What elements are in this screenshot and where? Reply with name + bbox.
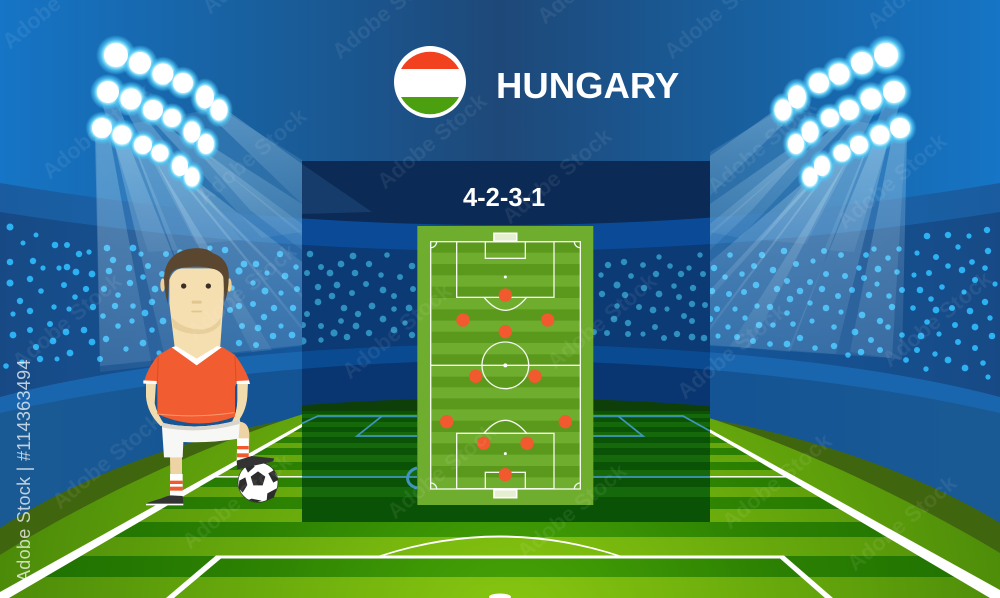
jersey (144, 347, 249, 424)
pitch spots (503, 275, 507, 455)
grass verge (0, 412, 1000, 598)
watermarks: Adobe Stock (47, 408, 167, 514)
right lamp glow (769, 35, 916, 193)
left floodlight beams (95, 100, 302, 372)
sock stripes (170, 446, 249, 491)
vertical stock credit: Adobe Stock | #114363494 (14, 359, 34, 582)
overlay top (302, 161, 710, 225)
crowd dots (3, 224, 998, 380)
lamp bulbs (92, 43, 228, 186)
overlay lower wall (302, 362, 710, 406)
right floodlight light wash (710, 108, 906, 358)
raised leg (233, 421, 249, 460)
left shoe (146, 495, 183, 504)
watermarks: Adobe Stock (717, 428, 837, 534)
watermarks: Adobe Stock (512, 458, 632, 564)
formation player markers (440, 288, 572, 481)
pitch stripes (432, 242, 580, 477)
standing leg (170, 456, 182, 497)
watermarks: Adobe Stock (7, 268, 127, 374)
grass embankment (0, 400, 1000, 598)
formation pitch card (417, 226, 593, 505)
overlay field stripes (302, 411, 710, 522)
faint beam through overlay (302, 164, 372, 214)
watermarks: Adobe Stock (177, 448, 297, 554)
collar (172, 346, 222, 365)
overlay stands (302, 244, 710, 352)
overlay lower band (302, 346, 710, 370)
overlay field (302, 414, 710, 497)
formation label: 4-2-3-1 (463, 184, 545, 212)
overlay stand band (302, 218, 710, 250)
watermarks: Adobe Stock (382, 418, 502, 524)
lamp glow (86, 35, 233, 193)
sleeve seams (157, 355, 236, 383)
jaw shadow (172, 317, 221, 334)
right floodlight lamps (769, 35, 916, 193)
lower stand wall (0, 360, 1000, 598)
right shoe (237, 456, 274, 469)
watermarks: Adobe Stock (832, 128, 952, 234)
watermarks: Adobe Stock (702, 93, 822, 199)
player illustration (143, 248, 278, 505)
arms (146, 383, 248, 426)
jersey hem (158, 413, 234, 416)
eyes (181, 283, 211, 289)
watermarks: Adobe Stock (877, 266, 997, 372)
field white lines (0, 416, 1000, 598)
title: HUNGARY (496, 65, 679, 106)
stand seating area (0, 212, 1000, 420)
watermarks: Adobe Stock (37, 78, 157, 184)
lower stand band (0, 344, 1000, 598)
ears (160, 278, 232, 292)
watermarks: Adobe Stock (497, 123, 617, 229)
neck and face (169, 268, 224, 363)
cuffs (143, 380, 250, 384)
watermarks: Adobe Stock (372, 88, 492, 194)
nose and mouth (191, 301, 202, 312)
central dark overlay panel (302, 161, 710, 522)
upper stand band (0, 183, 1000, 420)
card background (417, 226, 593, 505)
left floodlight lamps (86, 35, 233, 193)
hair (164, 248, 229, 304)
overlay crowd dots (299, 251, 708, 345)
shorts (162, 419, 240, 457)
overlay grass (302, 399, 710, 411)
socks (170, 438, 249, 497)
watermarks: Adobe Stock (192, 103, 312, 209)
flag: Hungary (394, 46, 466, 118)
watermarks: Adobe Stock (182, 238, 302, 344)
left shoe sole (146, 504, 183, 505)
pitch markings through overlay (302, 416, 710, 488)
right lamp bulbs (774, 43, 910, 186)
watermarks: Adobe Stock (542, 268, 662, 374)
field stripes (45, 427, 954, 577)
left floodlight light wash (96, 108, 302, 366)
soccer ball (238, 462, 278, 502)
watermarks: Adobe Stock (842, 470, 962, 576)
watermarks: Adobe Stock (672, 298, 792, 404)
right floodlight beams (710, 100, 907, 360)
goals (494, 233, 517, 498)
pitch lines (431, 242, 580, 489)
watermarks: Adobe Stock (337, 278, 457, 384)
shorts shadow (162, 419, 240, 430)
